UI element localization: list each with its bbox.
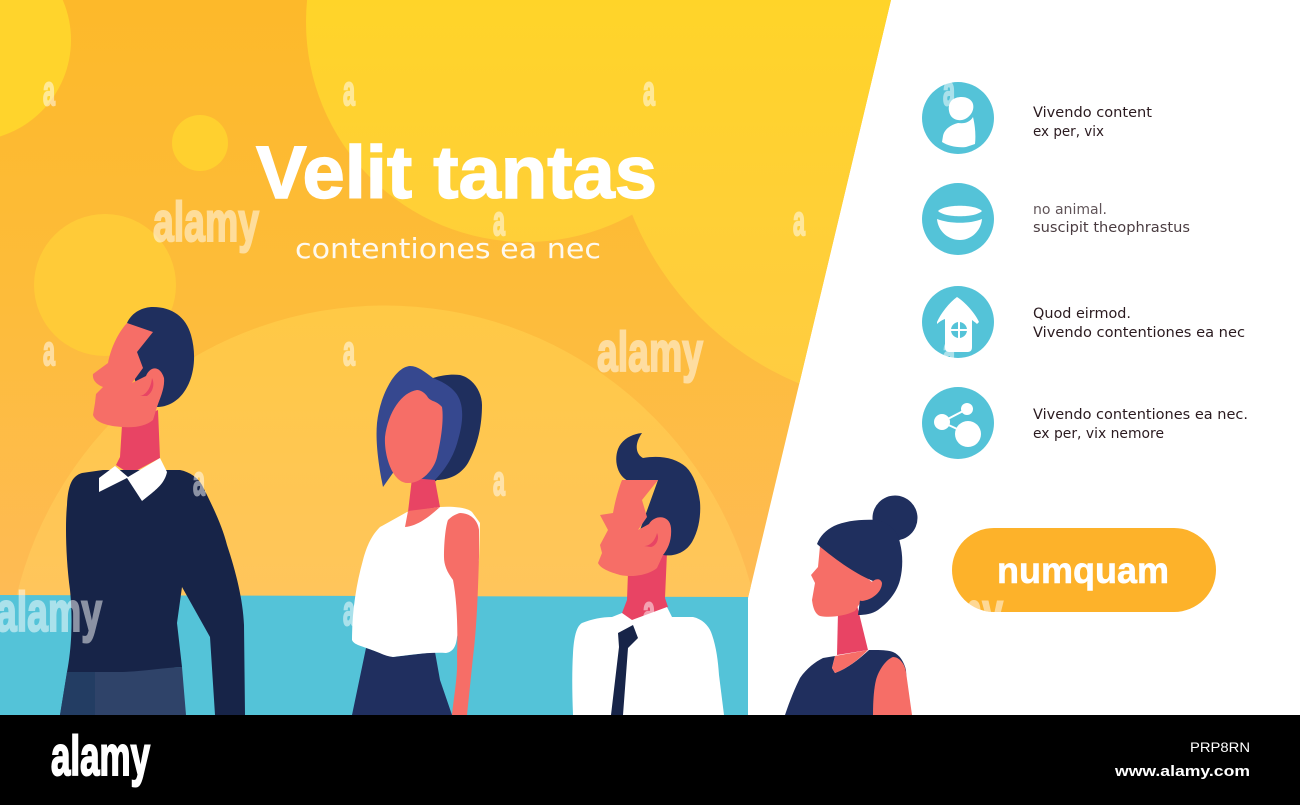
panel: orange sunset background xyxy=(0,0,891,598)
title: Velit tantas xyxy=(256,131,657,214)
text: item 1 xyxy=(1033,105,1153,140)
watermarks: a xyxy=(493,197,505,244)
footer logo: alamy xyxy=(51,724,150,787)
button: numquam: numquam xyxy=(997,550,1169,591)
watermarks: a xyxy=(43,67,55,114)
figure: man in dark sweater xyxy=(60,307,245,715)
text: item 4: Vivendo contentiones ea nec. xyxy=(1033,407,1248,423)
watermarks: alamy xyxy=(597,320,703,383)
watermarks: a xyxy=(943,327,955,374)
footer bar xyxy=(0,715,1300,805)
text: item 3: Quod eirmod. xyxy=(1033,306,1131,322)
watermarks: a xyxy=(343,327,355,374)
watermarks: a xyxy=(343,67,355,114)
figure: man in white shirt and tie xyxy=(572,433,724,715)
watermarks: alamy xyxy=(897,580,1003,643)
watermarks: a xyxy=(43,327,55,374)
footer image id: PRP8RN xyxy=(1190,739,1250,755)
watermarks: a xyxy=(643,67,655,114)
watermarks: a xyxy=(943,67,955,114)
figure: woman in white top xyxy=(352,366,482,715)
watermarks: a xyxy=(793,197,805,244)
watermarks xyxy=(0,67,1003,643)
watermarks: a xyxy=(193,457,205,504)
text: item 1: Vivendo content xyxy=(1033,105,1153,121)
icon: bowl xyxy=(922,183,994,255)
footer url: www.alamy.com xyxy=(1114,763,1250,780)
watermarks: alamy xyxy=(0,580,102,643)
text: item 2: suscipit theophrastus xyxy=(1033,220,1190,236)
icon: person xyxy=(922,82,994,154)
text: item 3 xyxy=(1033,306,1245,341)
text: item 3: Vivendo contentiones ea nec xyxy=(1033,325,1245,341)
watermarks: a xyxy=(343,587,355,634)
text: item 1: ex per, vix xyxy=(1033,124,1104,140)
icon: share nodes xyxy=(922,387,994,459)
text: item 2: no animal. xyxy=(1033,202,1107,218)
watermarks: a xyxy=(493,457,505,504)
subtitle: contentiones ea nec xyxy=(295,232,601,265)
watermarks: a xyxy=(643,587,655,634)
watermarks: alamy xyxy=(153,190,259,253)
figure: woman with hair bun xyxy=(785,496,918,715)
text: item 4: ex per, vix nemore xyxy=(1033,426,1164,442)
button: numquam xyxy=(952,528,1216,612)
text: item 4 xyxy=(1033,407,1248,442)
icon: house xyxy=(922,286,994,358)
text: item 2 xyxy=(1033,202,1190,236)
sea band xyxy=(0,595,748,715)
